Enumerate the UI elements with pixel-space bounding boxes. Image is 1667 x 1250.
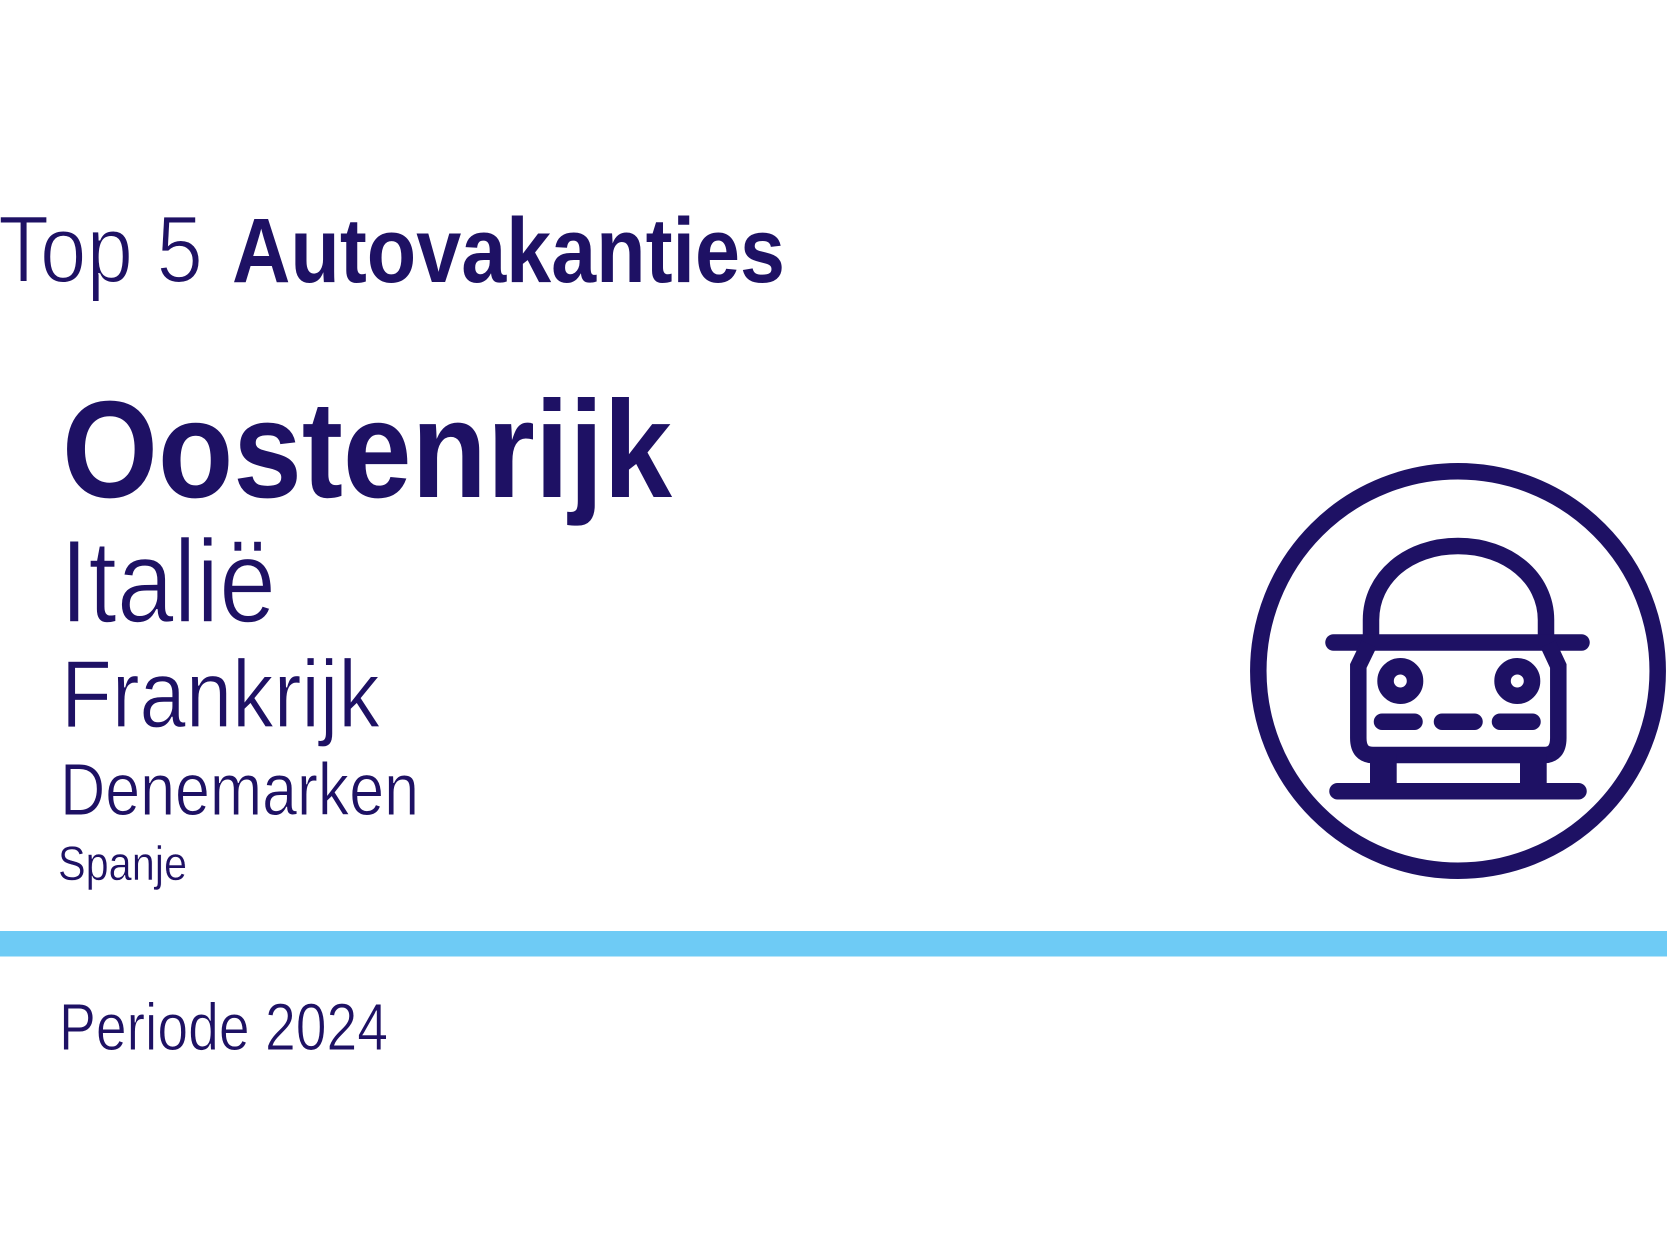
car body bbox=[1358, 644, 1558, 755]
ground line bbox=[1338, 783, 1578, 799]
rank 2: Italië: Italië bbox=[60, 516, 276, 648]
title: Top 5 bbox=[0, 196, 203, 303]
ranked list of countries bbox=[58, 373, 672, 891]
icon ring bbox=[1258, 471, 1658, 871]
grille bbox=[1382, 713, 1532, 730]
icon: car in circle bbox=[1258, 471, 1658, 871]
rank 3: Frankrijk: Frankrijk bbox=[61, 641, 381, 748]
rank 5: Spanje: Spanje bbox=[58, 838, 187, 891]
title: Autovakanties bbox=[232, 200, 785, 302]
car roof bbox=[1371, 546, 1546, 642]
period label: Periode 2024 bbox=[59, 990, 388, 1065]
left headlight bbox=[1386, 666, 1415, 696]
rank 4: Denemarken: Denemarken bbox=[60, 748, 419, 831]
car roofline bbox=[1334, 634, 1582, 651]
title bbox=[0, 196, 785, 303]
blue divider bar bbox=[0, 931, 1667, 956]
wheels bbox=[1370, 754, 1547, 790]
right headlight bbox=[1503, 666, 1532, 696]
rank 1: Oostenrijk: Oostenrijk bbox=[62, 373, 672, 527]
